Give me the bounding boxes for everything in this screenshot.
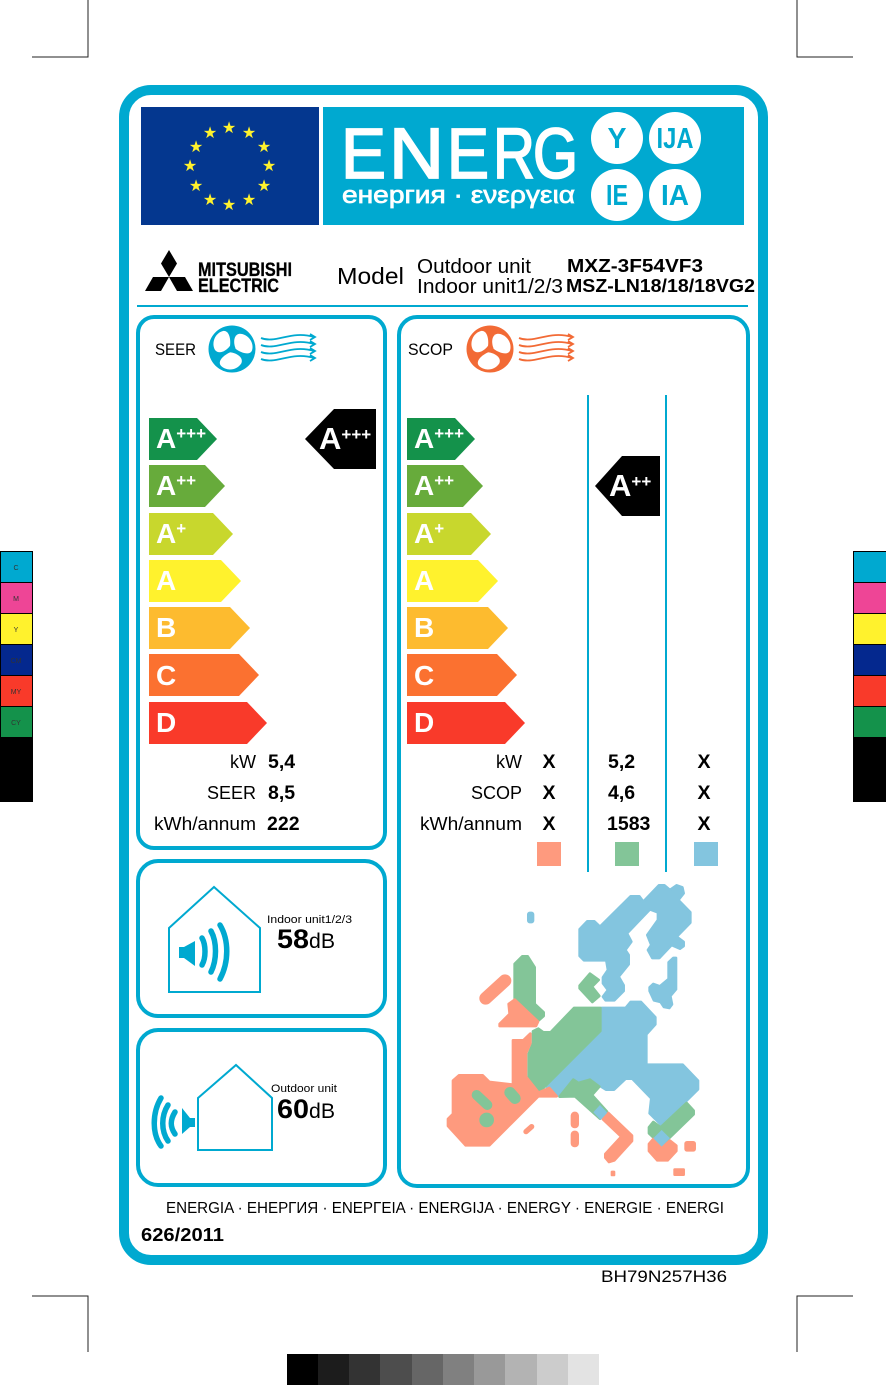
model information: MXZ-3F54VF3 xyxy=(567,256,703,276)
SCOP values table: 4,6 xyxy=(608,782,635,804)
SEER values: 8,5 xyxy=(268,782,295,804)
model information: Indoor unit1/2/3 xyxy=(417,276,563,298)
grey scale bar xyxy=(287,1354,599,1385)
SCOP values table: X xyxy=(697,813,711,835)
indoor noise value xyxy=(267,914,352,954)
icon: heating fan xyxy=(466,326,573,374)
EU flag: ★ xyxy=(242,125,256,142)
EU flag: ★ xyxy=(257,178,271,195)
energy scale: SEER: D xyxy=(156,707,176,738)
SEER values: kWh/annum xyxy=(154,814,256,834)
regulation number: 626/2011 xyxy=(141,1225,224,1245)
EU flag: ★ xyxy=(203,192,217,209)
colour bar left: MY xyxy=(11,689,22,696)
SCOP values table: 1583 xyxy=(607,813,651,835)
energy heading banner: E xyxy=(341,115,386,194)
climate zone swatches xyxy=(537,842,718,866)
SEER values: 222 xyxy=(267,813,300,835)
indoor noise value: 58 xyxy=(277,924,309,954)
energy scale: SCOP: A xyxy=(414,470,434,501)
SEER values: 5,4 xyxy=(268,751,295,773)
colour bar left: Y xyxy=(14,627,19,634)
EU flag: ★ xyxy=(242,192,256,209)
colour bar right xyxy=(853,551,886,802)
outdoor noise value xyxy=(271,1083,337,1124)
SEER values: SEER xyxy=(207,783,256,803)
colour bar left: C xyxy=(13,565,19,572)
rating arrow: A+++: A xyxy=(319,421,341,456)
energy scale: SCOP: A xyxy=(414,565,434,596)
EU flag: ★ xyxy=(203,125,217,142)
footer languages: ENERGIA · ЕНЕРГИЯ · ΕΝΕΡΓΕΙΑ · ENERGIJA · ENERGY · ENERGIE · ENERGI xyxy=(166,1200,724,1217)
EU flag: ★ xyxy=(262,158,276,175)
model information: MSZ-LN18/18/18VG2 xyxy=(566,276,755,296)
energy heading banner: IJA xyxy=(656,123,694,155)
outdoor noise value: 60 xyxy=(277,1094,309,1124)
colour bar left: M xyxy=(13,596,19,603)
SCOP values table: 5,2 xyxy=(608,751,635,773)
EU flag: ★ xyxy=(222,120,236,137)
EU flag: ★ xyxy=(183,158,197,175)
SEER heading: SEER xyxy=(155,340,196,359)
energy scale: SCOP: ++ xyxy=(434,471,454,490)
icon: house with outdoor speaker xyxy=(154,1065,272,1150)
logo: Mitsubishi Electric xyxy=(145,250,292,297)
icon: cooling fan xyxy=(208,326,315,374)
model information xyxy=(337,256,755,298)
icon: house with speaker xyxy=(169,887,260,992)
energy scale: SEER: A xyxy=(156,565,176,596)
rating arrow: A+++ xyxy=(305,409,376,469)
energy heading banner: G xyxy=(533,115,578,194)
SCOP values table: X xyxy=(542,782,556,804)
SCOP heading: SCOP xyxy=(408,340,453,359)
EU flag: ★ xyxy=(189,139,203,156)
energy scale: SCOP: + xyxy=(434,519,444,538)
indoor noise value: Indoor unit1/2/3 xyxy=(267,914,352,926)
model information: Model xyxy=(337,263,404,289)
model information: Outdoor unit xyxy=(417,256,531,278)
energy heading banner: IA xyxy=(661,180,689,212)
energy scale: SCOP: A xyxy=(414,423,434,454)
energy scale: SCOP: A xyxy=(414,518,434,549)
SEER values: kW xyxy=(230,752,256,772)
energy scale: SEER: A xyxy=(156,423,176,454)
panel: SEER xyxy=(138,317,385,848)
SCOP values table: X xyxy=(542,813,556,835)
colour bar left xyxy=(0,551,33,802)
energy scale: SEER: C xyxy=(156,660,176,691)
energy scale: SEER: A xyxy=(156,518,176,549)
logo: Mitsubishi Electric: ELECTRIC xyxy=(198,275,279,297)
rating arrow: A++: A xyxy=(609,468,631,503)
panel: indoor noise xyxy=(138,861,385,1016)
energy scale: SEER: B xyxy=(156,612,176,643)
rating arrow: A++ xyxy=(595,456,660,516)
outer label frame xyxy=(124,90,763,1260)
product code: BH79N257H36 xyxy=(601,1267,727,1286)
rating arrow: A+++: +++ xyxy=(341,425,371,444)
EU flag xyxy=(141,107,319,225)
energy heading banner: IE xyxy=(606,180,628,212)
climate zone map of Europe xyxy=(448,885,698,1175)
SCOP values table xyxy=(420,751,711,835)
energy scale: SCOP: D xyxy=(414,707,434,738)
SCOP values table: X xyxy=(697,782,711,804)
SCOP values table: kWh/annum xyxy=(420,814,522,834)
EU flag: ★ xyxy=(189,178,203,195)
panel: outdoor noise xyxy=(138,1030,385,1185)
energy heading banner: Y xyxy=(608,123,626,155)
panel: SCOP xyxy=(399,317,748,1186)
energy scale: SCOP: +++ xyxy=(434,424,464,443)
energy heading banner: енергия · ενεργεια xyxy=(342,182,575,209)
EU flag: ★ xyxy=(257,139,271,156)
colour bar left: CY xyxy=(11,720,21,727)
energy heading banner: R xyxy=(493,115,535,194)
energy scale: SEER xyxy=(149,418,267,744)
outdoor noise value: dB xyxy=(309,1100,335,1123)
logo: Mitsubishi Electric: MITSUBISHI xyxy=(198,259,292,281)
colour bar left: CM xyxy=(11,658,22,665)
energy scale: SCOP xyxy=(407,418,525,744)
energy scale: SEER: ++ xyxy=(176,471,196,490)
energy scale: SEER: A xyxy=(156,470,176,501)
SCOP values table: SCOP xyxy=(471,783,522,803)
SCOP values table: X xyxy=(542,751,556,773)
energy scale: SEER: +++ xyxy=(176,424,206,443)
EU flag: ★ xyxy=(222,197,236,214)
energy scale: SCOP: C xyxy=(414,660,434,691)
energy heading banner xyxy=(323,107,744,225)
SCOP values table: kW xyxy=(496,752,522,772)
SCOP values table: X xyxy=(697,751,711,773)
energy heading banner: E xyxy=(447,115,489,194)
energy scale: SEER: + xyxy=(176,519,186,538)
energy heading banner: N xyxy=(389,115,444,194)
rating arrow: A++: ++ xyxy=(631,472,651,491)
outdoor noise value: Outdoor unit xyxy=(271,1083,337,1095)
energy scale: SCOP: B xyxy=(414,612,434,643)
indoor noise value: dB xyxy=(309,930,335,953)
SEER values xyxy=(154,751,300,835)
